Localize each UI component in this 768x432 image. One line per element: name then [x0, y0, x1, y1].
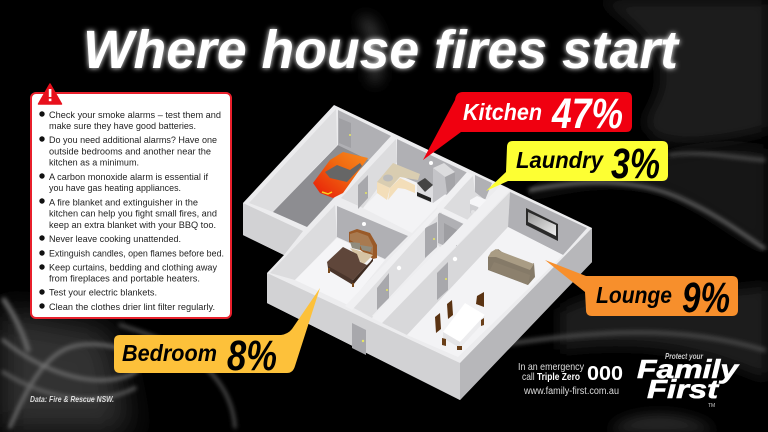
room: garage: [249, 109, 391, 227]
bullet list: Check your smoke alarms – test them and: [49, 110, 221, 121]
room: kitchen: [341, 139, 468, 233]
bullet list: Clean the clothes drier lint filter regularly.: [49, 302, 215, 313]
bullet list: from fireplaces and portable heaters.: [49, 274, 200, 284]
icon: kitchen counter: [377, 163, 420, 200]
emergency contact: 000: [587, 363, 623, 385]
bullet list: A carbon monoxide alarm is essential if: [49, 172, 208, 183]
callout: laundry: Laundry: [516, 147, 604, 173]
bullet list: you have gas heating appliances.: [49, 183, 181, 194]
callout: laundry: [486, 140, 668, 191]
logo: Family First: Protect your: [665, 351, 704, 361]
title: Where house fires start: [83, 20, 680, 80]
icon: dining table: [435, 292, 485, 350]
bullet list: keep an extra blanket with your BBQ too.: [49, 220, 216, 231]
callout: kitchen: 47%: [551, 90, 623, 138]
room: laundry: [436, 172, 492, 222]
icon: fridge: [433, 163, 455, 203]
icon: sofa: [488, 249, 535, 285]
emergency contact: In an emergency: [518, 361, 585, 373]
callout: lounge: [545, 260, 738, 322]
icon: wall television: [526, 208, 558, 241]
callout: bedroom: Bedroom: [122, 340, 217, 366]
house shell: [243, 105, 592, 400]
room: bedroom: [270, 205, 408, 305]
callout: laundry: 3%: [611, 140, 660, 188]
panel: safety checklist: [31, 84, 231, 318]
bullet list: outside bedrooms and another near the: [49, 146, 211, 158]
callout: bedroom: 8%: [227, 332, 277, 380]
emergency contact: [518, 361, 623, 397]
callout: lounge: Lounge: [596, 282, 672, 308]
callout: lounge: 9%: [682, 274, 730, 322]
bullet list: kitchen can help you fight small fires, and: [49, 208, 217, 220]
emergency contact: www.family-first.com.au: [523, 386, 619, 397]
room: hall: [345, 207, 472, 321]
icon: bed: [327, 229, 377, 287]
bullet list: A fire blanket and extinguisher in the: [49, 198, 198, 208]
icon: orange car: [313, 152, 368, 198]
callout: kitchen: Kitchen: [463, 99, 542, 125]
emergency contact: call Triple Zero: [522, 371, 580, 383]
callout: bedroom: [114, 288, 320, 380]
bullet list: Keep curtains, bedding and clothing away: [49, 262, 217, 274]
source note: Data: Fire & Rescue NSW.: [30, 394, 114, 404]
isometric house: [243, 105, 592, 400]
logo: Family First: TM: [708, 403, 715, 409]
bullet list: make sure they have good batteries.: [49, 121, 196, 132]
logo: Family First: [637, 351, 740, 409]
front door: [352, 323, 366, 355]
bullet list: Never leave cooking unattended.: [49, 234, 181, 245]
room: lounge: [372, 185, 587, 357]
bullet list: Extinguish candles, open flames before bed.: [49, 248, 224, 260]
callout: kitchen: [423, 90, 632, 160]
bullet list: [39, 110, 224, 313]
icon: stove: [417, 178, 433, 203]
bullet list: Do you need additional alarms? Have one: [49, 135, 217, 146]
bullet list: Test your electric blankets.: [49, 288, 157, 298]
title: Where house fires start: [83, 20, 680, 80]
logo: Family First: First: [647, 374, 720, 404]
bullet list: kitchen as a minimum.: [49, 158, 139, 168]
logo: Family First: Family: [637, 354, 740, 384]
icon: warning triangle: [38, 84, 62, 104]
icon: washing machine: [470, 196, 492, 216]
